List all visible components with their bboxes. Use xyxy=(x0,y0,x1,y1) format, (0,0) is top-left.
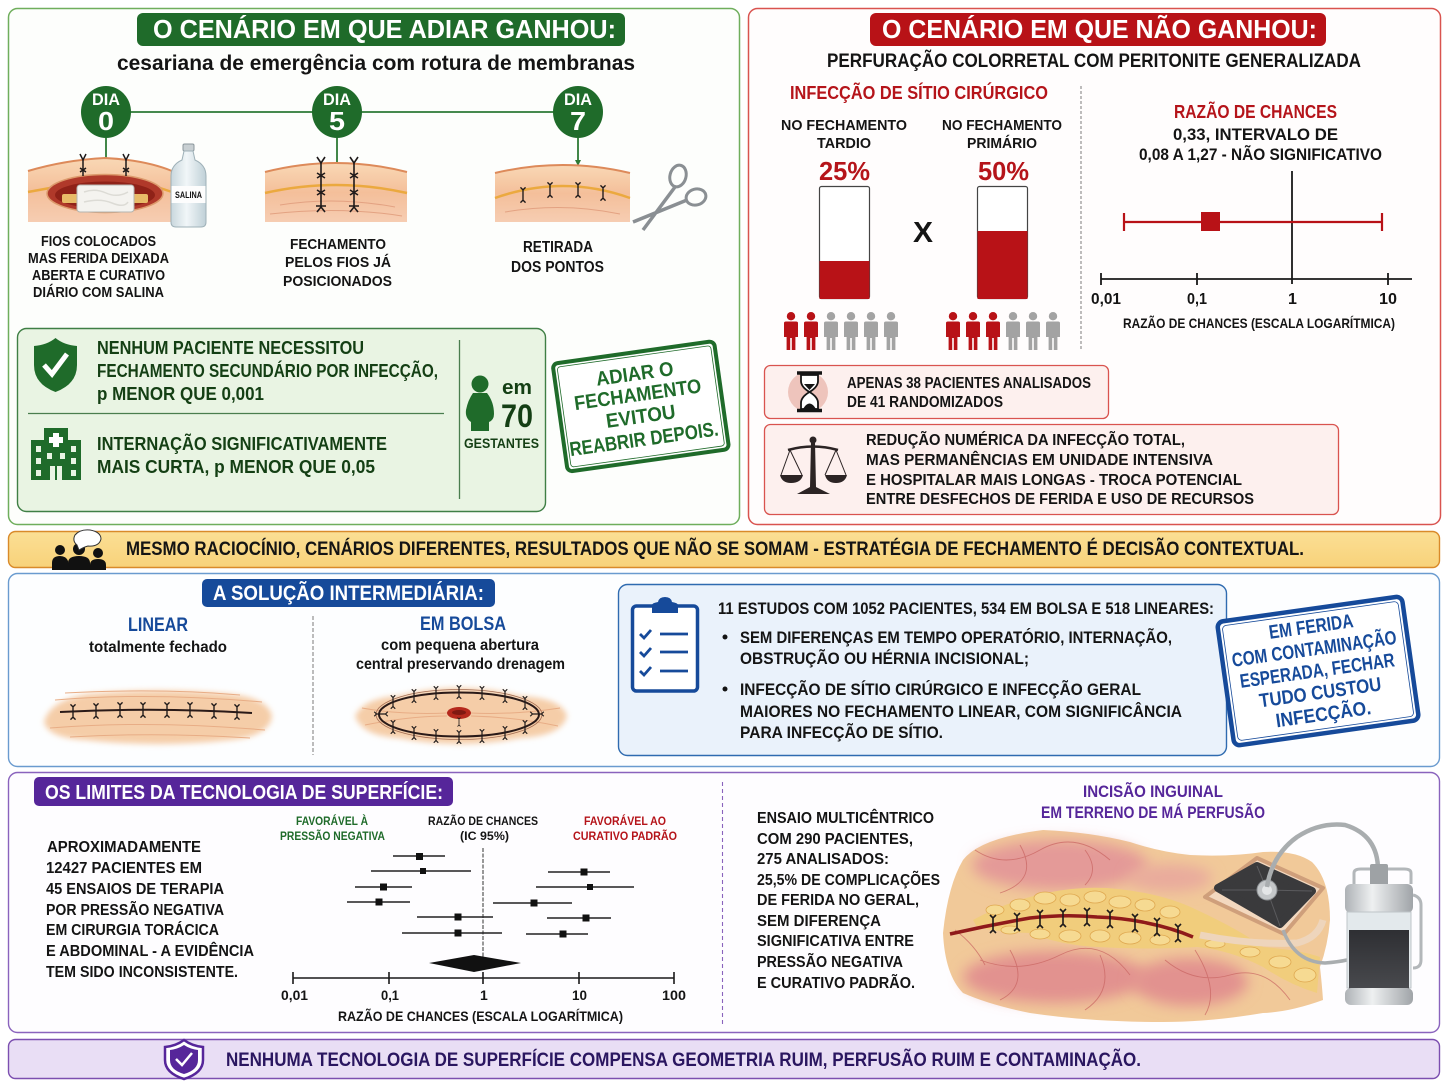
symbol: versus X: X xyxy=(913,217,934,249)
chart: odds ratio interval: 0,01 xyxy=(1091,291,1121,308)
stamp: delaying avoided reopening: ADIAR O xyxy=(595,358,675,391)
text: 12427 patients: POR PRESSÃO NEGATIVA xyxy=(46,899,224,919)
chart: forest plot xyxy=(280,813,686,1024)
icon: balance scale xyxy=(780,436,847,494)
chart: forest plot: CURATIVO PADRÃO xyxy=(573,828,677,843)
list: greater infection with linear: PARA INFECÇÃO DE SÍTIO. xyxy=(740,722,943,742)
icons: people primary closure xyxy=(946,312,1060,350)
banner: same reasoning, different scenarios: MESMO RACIOCÍNIO, CENÁRIOS DIFERENTES, RESULTADOS QUE NÃO SE SOMAM - ESTRATÉGIA DE FECHAMENTO É DECISÃO CONTEXTUAL. xyxy=(126,538,1304,560)
icon: saline bottle xyxy=(171,144,206,227)
chart: odds ratio interval: 1 xyxy=(1288,291,1297,308)
text: multicentre trial xyxy=(757,808,940,992)
list: greater infection with linear xyxy=(722,679,1182,742)
icon: purple shield xyxy=(165,1040,203,1079)
illustration: closure through placed sutures xyxy=(265,157,407,222)
heading: surgical site infection: INFECÇÃO DE SÍTIO CIRÚRGICO xyxy=(790,82,1048,103)
stamp: delaying avoided reopening: REABRIR DEPOIS. xyxy=(568,418,720,461)
text: multicentre trial: E CURATIVO PADRÃO. xyxy=(757,972,915,992)
text: shorter stay: MAIS CURTA, p MENOR QUE 0,05 xyxy=(97,456,375,477)
stamp: contaminated wound xyxy=(1217,596,1419,746)
panel: scenario where it did not win xyxy=(748,8,1440,524)
stamp: contaminated wound: EM FERIDA xyxy=(1267,610,1355,644)
title: limits of surface technology: OS LIMITES DA TECNOLOGIA DE SUPERFÍCIE: xyxy=(45,781,443,804)
illustration: healed skin with stitches xyxy=(495,165,630,222)
caption: day 0: FIOS COLOCADOS xyxy=(41,234,156,250)
banner: no surface technology compensates: NENHUMA TECNOLOGIA DE SUPERFÍCIE COMPENSA GEOMETRIA RUIM, PERFUSÃO RUIM E CONTAMINAÇÃO. xyxy=(226,1049,1141,1071)
text: odds ratio: 0,08 A 1,27 - NÃO SIGNIFICATIVO xyxy=(1139,144,1382,164)
text: odds ratio: 0,33, INTERVALO DE xyxy=(1173,125,1338,144)
list: no differences: OBSTRUÇÃO OU HÉRNIA INCISIONAL; xyxy=(740,648,1029,668)
panel: delay results xyxy=(18,328,546,512)
icon: scissors xyxy=(633,163,708,230)
bar: primary closure 50%: NO FECHAMENTO xyxy=(942,117,1062,134)
callout: patients analysed: APENAS 38 PACIENTES ANALISADOS xyxy=(847,375,1091,392)
bar: late closure 25%: 25% xyxy=(819,156,870,186)
text: purse-string closure: central preservando drenagem xyxy=(356,656,565,673)
text: purse-string closure xyxy=(356,614,565,673)
chart: forest plot: 100 xyxy=(662,987,686,1003)
chart: odds ratio interval xyxy=(1091,171,1412,331)
text: 12427 patients: TEM SIDO INCONSISTENTE. xyxy=(46,964,238,981)
bar: late closure 25% xyxy=(781,117,907,299)
caption: day 7: DOS PONTOS xyxy=(511,259,604,276)
text: shorter stay xyxy=(97,433,387,477)
text: 12427 patients: 12427 PACIENTES EM xyxy=(46,860,202,877)
text: multicentre trial: ENSAIO MULTICÊNTRICO xyxy=(757,808,934,827)
callout: trade-off: E HOSPITALAR MAIS LONGAS - TROCA POTENCIAL xyxy=(866,472,1242,489)
text: no secondary closure xyxy=(97,337,438,404)
icons: people late closure xyxy=(784,312,898,350)
title: intermediate solution: A SOLUÇÃO INTERMEDIÁRIA: xyxy=(213,582,484,605)
caption: day 5: FECHAMENTO xyxy=(290,236,386,253)
list: no differences: SEM DIFERENÇAS EM TEMPO OPERATÓRIO, INTERNAÇÃO, xyxy=(740,627,1172,647)
icon: hourglass xyxy=(788,372,828,412)
stamp: contaminated wound: TUDO CUSTOU xyxy=(1258,673,1383,712)
caption: day 0: ABERTA E CURATIVO xyxy=(32,268,165,284)
chart: forest plot: RAZÃO DE CHANCES xyxy=(428,813,538,828)
chart: forest plot: 0,01 xyxy=(281,987,308,1003)
callout: patients analysed xyxy=(764,366,1108,418)
text: multicentre trial: DE FERIDA NO GERAL, xyxy=(757,892,919,909)
stamp: contaminated wound: ESPERADA, FECHAR xyxy=(1239,649,1396,693)
title: did not win: O CENÁRIO EM QUE NÃO GANHOU: xyxy=(882,14,1317,44)
text: linear closure xyxy=(89,615,227,656)
timeline: day 0, 5, 7: DIA xyxy=(92,90,120,109)
heading: inguinal incision: EM TERRENO DE MÁ PERFUSÃO xyxy=(1041,802,1265,822)
text: multicentre trial: COM 290 PACIENTES, xyxy=(757,831,913,848)
stat: 70 pregnant women xyxy=(464,377,539,451)
text: 12427 patients xyxy=(46,839,254,981)
icon: pregnant woman xyxy=(466,376,494,431)
panel: scenario where delaying won xyxy=(8,8,740,524)
timeline: day 0, 5, 7: 5 xyxy=(329,106,345,136)
stat: 70 pregnant women: 70 xyxy=(501,398,533,434)
text: no secondary closure: NENHUM PACIENTE NECESSITOU xyxy=(97,337,364,358)
chart: odds ratio interval: 10 xyxy=(1379,291,1397,308)
timeline: day 0, 5, 7: DIA xyxy=(323,90,351,109)
text: linear closure: LINEAR xyxy=(128,615,188,636)
panel: limits of surface technology xyxy=(8,772,1440,1032)
caption: day 5: POSICIONADOS xyxy=(283,273,392,290)
stat: 70 pregnant women: em xyxy=(502,377,532,399)
banner: no surface technology compensates xyxy=(8,1040,1440,1079)
heading: inguinal incision: INCISÃO INGUINAL xyxy=(1083,781,1223,801)
chart: forest plot: 0,1 xyxy=(381,987,399,1003)
stamp: delaying avoided reopening: FECHAMENTO xyxy=(573,375,703,415)
caption: day 7: RETIRADA xyxy=(523,239,593,256)
callout: trade-off: MAS PERMANÊNCIAS EM UNIDADE INTENSIVA xyxy=(866,450,1213,469)
illustration: linear suture xyxy=(44,690,272,744)
text: 12427 patients: 45 ENSAIOS DE TERAPIA xyxy=(46,881,224,898)
bar: late closure 25%: NO FECHAMENTO xyxy=(781,117,907,134)
text: 12427 patients: APROXIMADAMENTE xyxy=(47,839,201,856)
icon: hospital xyxy=(31,428,81,480)
chart: odds ratio interval: RAZÃO DE CHANCES (ESCALA LOGARÍTMICA) xyxy=(1123,314,1395,331)
text: 12427 patients: EM CIRURGIA TORÁCICA xyxy=(46,920,219,939)
stamp: contaminated wound: COM CONTAMINAÇÃO xyxy=(1230,626,1398,672)
text: odds ratio xyxy=(1139,101,1382,164)
bar: late closure 25%: TARDIO xyxy=(817,135,871,152)
chart: forest plot: 10 xyxy=(572,987,587,1003)
heading: inguinal incision xyxy=(1041,781,1265,822)
chart: forest plot: (IC 95%) xyxy=(460,829,509,843)
title: delay won: O CENÁRIO EM QUE ADIAR GANHOU: xyxy=(153,14,616,44)
subtitle: colorectal perforation: PERFURAÇÃO COLORRETAL COM PERITONITE GENERALIZADA xyxy=(827,50,1361,72)
panel: study evidence xyxy=(618,584,1226,756)
list: no differences xyxy=(722,627,1172,668)
icon: checklist clipboard xyxy=(632,597,698,691)
illustration: open wound with gauze xyxy=(28,154,172,222)
bar: primary closure 50%: PRIMÁRIO xyxy=(967,135,1037,152)
title: limits of surface technology xyxy=(34,777,453,806)
caption: day 5 xyxy=(283,236,392,290)
text: no secondary closure: p MENOR QUE 0,001 xyxy=(97,383,264,404)
icon: saline bottle: SALINA xyxy=(175,190,202,200)
panel: intermediate solution xyxy=(8,574,1440,766)
stamp: delaying avoided reopening xyxy=(553,341,729,472)
caption: day 0: DIÁRIO COM SALINA xyxy=(33,284,164,301)
chart: forest plot: FAVORÁVEL AO xyxy=(584,813,666,828)
text: 12427 patients: E ABDOMINAL - A EVIDÊNCIA xyxy=(46,941,254,960)
text: multicentre trial: SEM DIFERENÇA xyxy=(757,913,881,930)
text: multicentre trial: PRESSÃO NEGATIVA xyxy=(757,951,903,971)
icon: group with speech bubble xyxy=(52,530,106,570)
chart: forest plot: 1 xyxy=(480,987,488,1003)
text: purse-string closure: EM BOLSA xyxy=(420,614,506,635)
text: multicentre trial: SIGNIFICATIVA ENTRE xyxy=(757,933,914,950)
caption: day 7 xyxy=(511,239,604,276)
text: odds ratio: RAZÃO DE CHANCES xyxy=(1174,101,1337,122)
callout: trade-off: REDUÇÃO NUMÉRICA DA INFECÇÃO TOTAL, xyxy=(866,429,1185,449)
timeline: day 0, 5, 7: DIA xyxy=(564,90,592,109)
caption: day 0: MAS FERIDA DEIXADA xyxy=(28,251,169,267)
chart: forest plot: PRESSÃO NEGATIVA xyxy=(280,828,385,843)
chart: odds ratio interval: 0,1 xyxy=(1187,291,1207,308)
stat: 70 pregnant women: GESTANTES xyxy=(464,435,539,451)
text: no secondary closure: FECHAMENTO SECUNDÁRIO POR INFECÇÃO, xyxy=(97,360,438,381)
bar: primary closure 50% xyxy=(942,117,1062,299)
timeline: day 0, 5, 7: 0 xyxy=(98,106,114,136)
caption: day 0 xyxy=(28,234,169,301)
text: linear closure: totalmente fechado xyxy=(89,639,227,656)
timeline: day 0, 5, 7: 7 xyxy=(570,106,586,136)
illustration: inguinal incision with negative pressure xyxy=(943,824,1421,1022)
stamp: contaminated wound: INFECÇÃO. xyxy=(1274,696,1372,732)
text: eleven studies: 11 ESTUDOS COM 1052 PACIENTES, 534 EM BOLSA E 518 LINEARES: xyxy=(718,600,1214,618)
callout: trade-off xyxy=(764,424,1338,514)
text: shorter stay: INTERNAÇÃO SIGNIFICATIVAMENTE xyxy=(97,433,387,454)
chart: forest plot: RAZÃO DE CHANCES (ESCALA LOGARÍTMICA) xyxy=(338,1007,623,1024)
subtitle: emergency cesarean: cesariana de emergência com rotura de membranas xyxy=(117,52,635,75)
timeline: day 0, 5, 7 xyxy=(81,86,603,166)
chart: forest plot: FAVORÁVEL À xyxy=(296,813,368,828)
illustration: purse-string suture xyxy=(355,685,567,744)
list: greater infection with linear: INFECÇÃO DE SÍTIO CIRÚRGICO E INFECÇÃO GERAL xyxy=(740,679,1141,699)
stamp: delaying avoided reopening: EVITOU xyxy=(605,401,677,433)
icon: shield with check xyxy=(34,338,77,392)
list: greater infection with linear: MAIORES NO FECHAMENTO LINEAR, COM SIGNIFICÂNCIA xyxy=(740,702,1182,721)
text: multicentre trial: 25,5% DE COMPLICAÇÕES xyxy=(757,869,940,889)
banner: same reasoning, different scenarios xyxy=(8,530,1440,570)
text: purse-string closure: com pequena abertura xyxy=(381,637,539,654)
text: multicentre trial: 275 ANALISADOS: xyxy=(757,851,889,868)
caption: day 5: PELOS FIOS JÁ xyxy=(285,254,391,271)
callout: patients analysed: DE 41 RANDOMIZADOS xyxy=(847,394,1003,411)
bar: primary closure 50%: 50% xyxy=(978,156,1029,186)
callout: trade-off: ENTRE DESFECHOS DE FERIDA E USO DE RECURSOS xyxy=(866,491,1254,508)
